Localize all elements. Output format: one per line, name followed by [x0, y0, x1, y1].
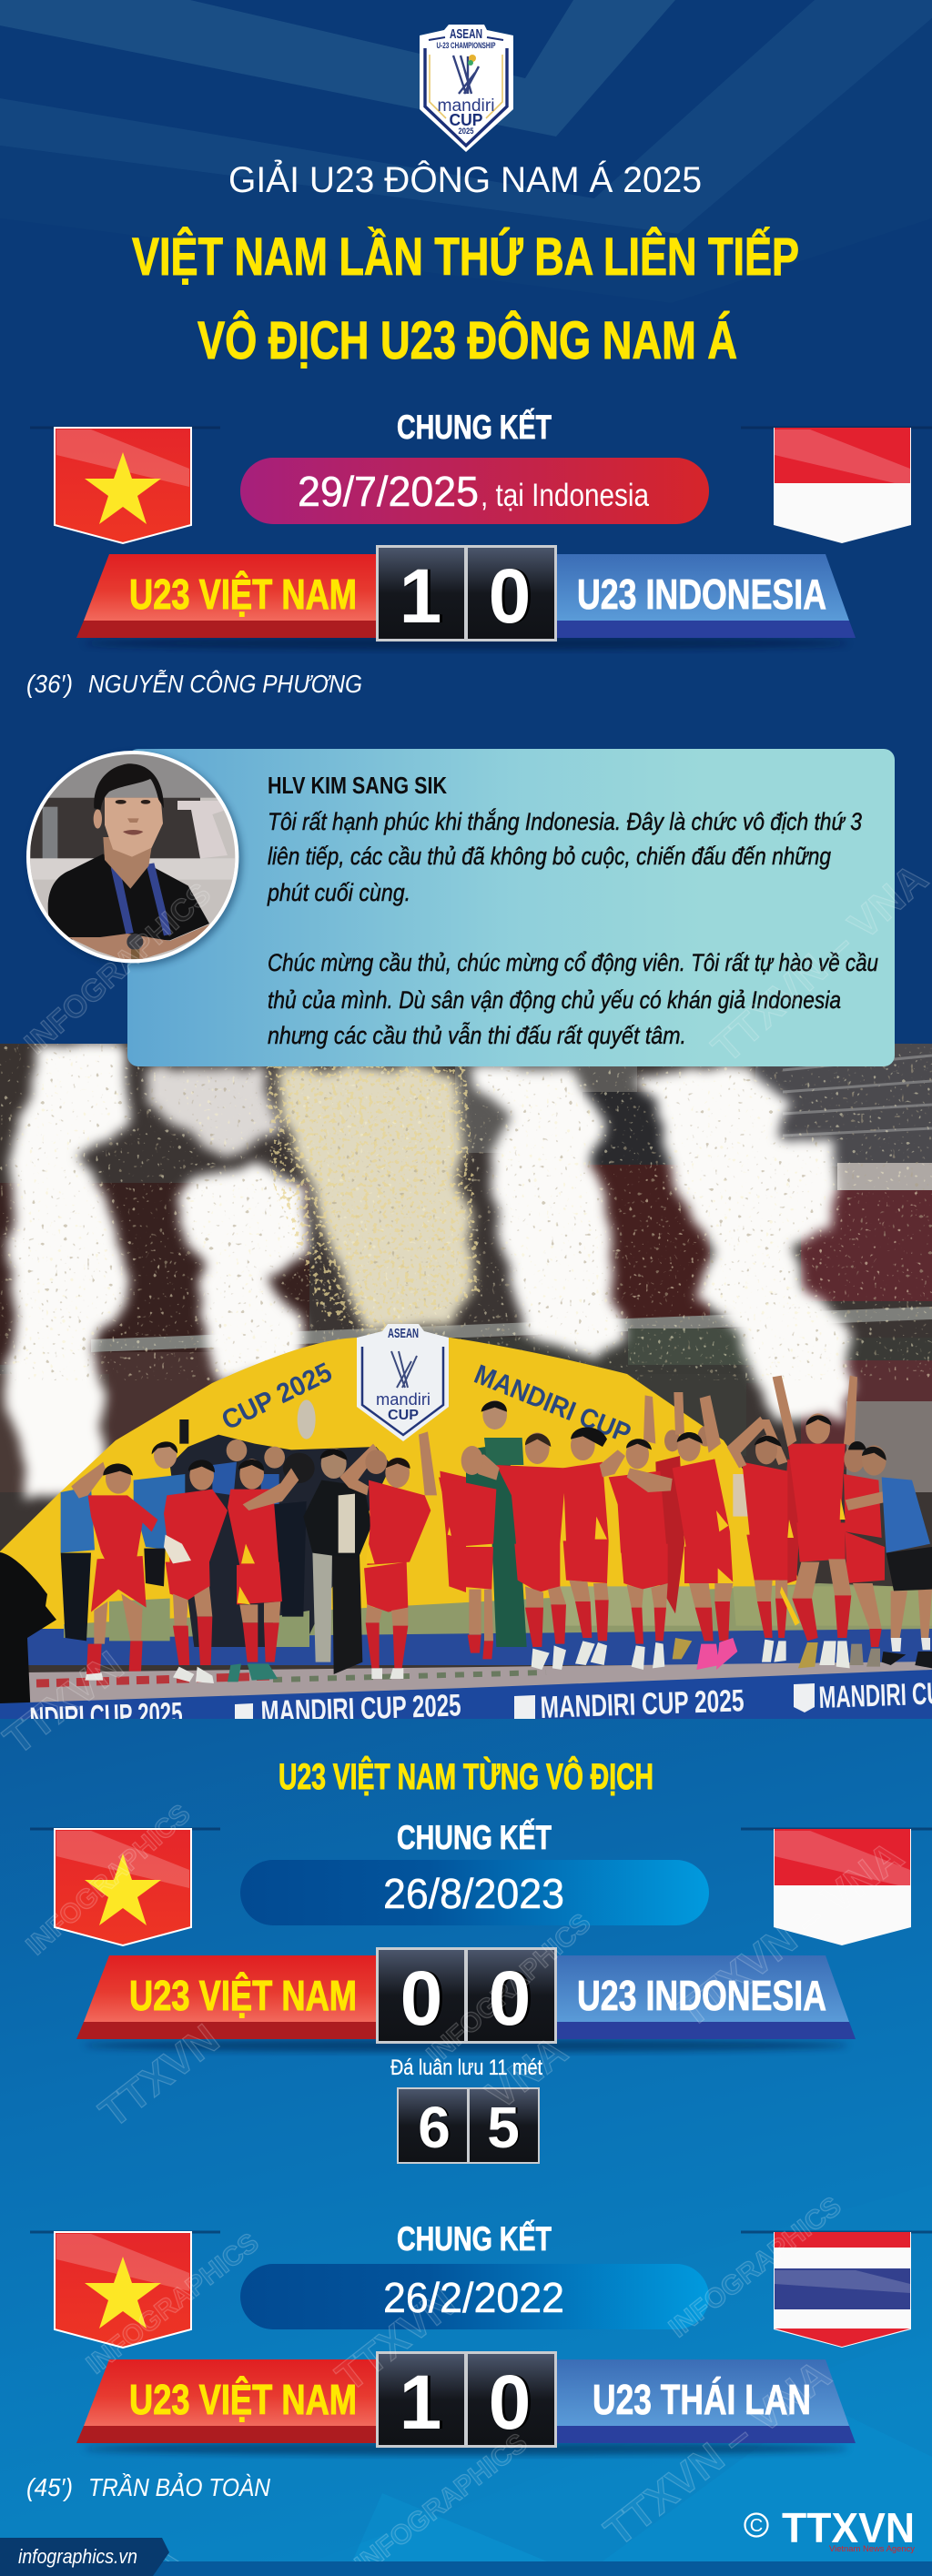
- team bar: U23 Viet Nam: [76, 2359, 382, 2443]
- photo logo on arch: ASEAN: [388, 1326, 419, 1341]
- goal scorer: (36′): [26, 670, 73, 698]
- flag: Viet Nam: [30, 2232, 220, 2348]
- section heading: U23 VIỆT NAM TỪNG VÔ ĐỊCH: [279, 1755, 653, 1797]
- watermarks: INFOGRAPHICS: [664, 2191, 847, 2344]
- title: VÔ ĐỊCH U23 ĐÔNG NAM Á: [198, 311, 737, 370]
- score: 1-0: 1: [402, 2359, 444, 2445]
- photo logo on arch: CUP: [388, 1408, 419, 1423]
- score: 1-0: 1: [400, 2359, 441, 2445]
- team bar: U23 Viet Nam: U23 VIỆT NAM: [129, 2376, 357, 2423]
- squad: legs and arms skin: [71, 1431, 437, 1644]
- team bar: U23 Viet Nam: [76, 1955, 382, 2039]
- quote text: HLV KIM SANG SIK: [268, 772, 447, 799]
- watermarks: TTXVN: [327, 2278, 464, 2400]
- team bar: U23 Thai Lan: [552, 2359, 856, 2443]
- watermarks: TTXVN – VNA: [703, 854, 932, 1071]
- score: 1-0: 0: [491, 553, 533, 639]
- photo logo on arch: mandiri: [376, 1390, 431, 1409]
- goal scorer: [26, 2472, 271, 2501]
- logo: TTXVN copyright: C: [750, 2516, 763, 2536]
- players and staff: right half: [439, 1376, 932, 1670]
- penalty score: 6-5: 5: [487, 2095, 520, 2160]
- scoreboard: [76, 545, 856, 650]
- team bar: U23 Indonesia: [552, 1955, 856, 2039]
- photographer silhouette: [0, 1552, 56, 1719]
- watermarks: [0, 854, 932, 2576]
- date pill: [240, 1860, 709, 1925]
- score: 1-0: 0: [489, 2359, 531, 2445]
- quote text: nhưng các cầu thủ vẫn thi đấu rất quyết tâm.: [268, 1022, 686, 1049]
- watermarks: INFOGRAPHICS: [21, 1799, 197, 1961]
- goal scorer: TRẦN BẢO TOÀN: [88, 2472, 271, 2501]
- flag: Thailand: [741, 2232, 932, 2348]
- date pill: 26/2/2022: [383, 2274, 564, 2321]
- watermarks: VNA: [477, 2026, 576, 2118]
- score: 0-0: 0: [403, 1955, 445, 2041]
- logo: TTXVN copyright: TTXVN: [782, 2504, 915, 2551]
- quote text: thủ của mình. Dù sân vận động chủ yếu có khán giả Indonesia: [268, 986, 841, 1014]
- score: 1-0: 1: [402, 553, 444, 639]
- sponsor banner: [0, 1670, 932, 1719]
- match card: final 2022: [26, 2220, 932, 2501]
- team bar: U23 Viet Nam: U23 VIỆT NAM: [129, 571, 357, 618]
- coach portrait: [26, 751, 242, 966]
- footer strip: [0, 2538, 932, 2576]
- flag: Indonesia: [741, 428, 932, 543]
- smoke plumes: [6, 1044, 850, 1497]
- squad: heads, hair, boots and accents: [461, 1413, 880, 1670]
- watermarks: TTXVN: [90, 2015, 228, 2137]
- dignitary in dark suit: [283, 1449, 371, 1674]
- watermarks: INFOGRAPHICS: [18, 876, 218, 1061]
- stage floor: [18, 1583, 932, 1706]
- logo: Mandiri Cup 2025 shield: 2025: [459, 126, 473, 136]
- date pill: 26/8/2023: [383, 1870, 564, 1917]
- watermarks: TTXVN – VNA: [595, 2350, 839, 2555]
- scoreboard: [76, 2351, 856, 2455]
- squad: legs and arms skin: [469, 1376, 932, 1641]
- score: 1-0: 0: [491, 2359, 533, 2445]
- squad: heads, hair, boots and accents: [85, 1450, 458, 1683]
- scoreboard: [76, 1947, 856, 2052]
- score: 0-0: [376, 1947, 557, 2044]
- score: 0-0: 0: [400, 1955, 442, 2041]
- background: keeper and crowd: [466, 1400, 932, 1647]
- quote text: liên tiếp, các cầu thủ đã không bỏ cuộc, chiến đấu đến những: [268, 843, 831, 870]
- penalty score: 6-5: 6: [418, 2095, 451, 2160]
- penalty score: 6-5: 6: [420, 2095, 452, 2160]
- players and staff: left half: [61, 1399, 466, 1683]
- yellow stage arch: [0, 1338, 819, 1647]
- flag: Viet Nam: [30, 428, 220, 543]
- sponsor banner: MANDIRI CUP 2025: [540, 1683, 745, 1725]
- top background: [0, 0, 932, 1044]
- heading: chung ket: CHUNG KẾT: [397, 2220, 552, 2258]
- flag: Viet Nam: [30, 1829, 220, 1945]
- heading: chung ket: CHUNG KẾT: [397, 1819, 552, 1856]
- score: 1-0: 1: [400, 553, 441, 639]
- squad: socks: [86, 1617, 408, 1674]
- goal scorer: NGUYỄN CÔNG PHƯƠNG: [88, 670, 362, 698]
- squad: socks: [468, 1595, 882, 1659]
- logo: TTXVN copyright: Vietnam News Agency: [829, 2544, 916, 2553]
- match card: final 2025: [26, 409, 932, 698]
- team bar: U23 Thai Lan: U23 THÁI LAN: [593, 2376, 811, 2423]
- subtitle: GIẢI U23 ĐÔNG NAM Á 2025: [228, 158, 702, 200]
- match card: final 2023: [30, 1819, 932, 2164]
- team bar: U23 Indonesia: U23 INDONESIA: [577, 571, 826, 618]
- stadium stands: [0, 1044, 932, 1492]
- date pill: 29/7/2025: [298, 468, 479, 515]
- watermarks: INFOGRAPHICS: [81, 2227, 265, 2380]
- background staff and crowd: [61, 1399, 391, 1647]
- team bar: U23 Indonesia: [552, 554, 856, 638]
- confetti: [0, 1044, 932, 1380]
- watermarks: TTXVN – VNA: [668, 1832, 912, 2036]
- date pill: [240, 2264, 709, 2329]
- logo: Mandiri Cup 2025 shield: [420, 25, 513, 152]
- yellow stage arch: CUP 2025: [218, 1358, 337, 1436]
- watermarks: INFOGRAPHICS: [421, 1908, 597, 2070]
- red squad: shirts and shorts: [88, 1471, 466, 1612]
- source: infographics.vn: infographics.vn: [18, 2545, 137, 2568]
- staff in blue shirt: [862, 1445, 932, 1668]
- sponsor banner: MANDIRI CUP 2025: [260, 1688, 461, 1730]
- title: [132, 227, 799, 370]
- heading: chung ket: CHUNG KẾT: [397, 409, 552, 446]
- watermarks: INFOGRAPHICS: [350, 2428, 533, 2576]
- score: 1-0: [376, 2351, 557, 2448]
- flag: Indonesia: [741, 1829, 932, 1945]
- sponsor banner: NDIRI CUP 2025: [29, 1696, 183, 1736]
- red squad: shirts and shorts: [439, 1444, 885, 1592]
- date pill: [240, 458, 709, 524]
- quote panel: coach Kim Sang Sik: [26, 749, 895, 1066]
- penalty label: Đá luân lưu 11 mét: [390, 2056, 542, 2080]
- lower background: [0, 1719, 932, 2576]
- logo: Mandiri Cup 2025 shield: mandiri: [437, 96, 495, 116]
- score: 0-0: 0: [491, 1955, 533, 2041]
- date pill: , tại Indonesia: [481, 478, 649, 513]
- score: 1-0: 0: [489, 553, 531, 639]
- photo: team celebrating with trophy: [0, 1044, 932, 1736]
- yellow stage arch: MANDIRI CUP: [470, 1359, 634, 1450]
- photo logo on arch: [357, 1324, 449, 1441]
- quote text: [267, 772, 878, 1049]
- team bar: U23 Indonesia: U23 INDONESIA: [577, 1972, 826, 2019]
- penalty score: 6-5: [397, 2087, 540, 2164]
- team bar: U23 Viet Nam: [76, 554, 382, 638]
- logo: Mandiri Cup 2025 shield: CUP: [450, 111, 482, 129]
- quote text: phút cuối cùng.: [267, 879, 410, 906]
- score: 1-0: [376, 545, 557, 641]
- team bar: U23 Viet Nam: U23 VIỆT NAM: [129, 1972, 357, 2019]
- goal scorer: (45′): [26, 2473, 73, 2501]
- logo: Mandiri Cup 2025 shield: U-23 CHAMPIONSHIP: [437, 41, 495, 50]
- logo: Mandiri Cup 2025 shield: ASEAN: [450, 26, 482, 42]
- penalty score: 6-5: 5: [489, 2095, 522, 2160]
- score: 0-0: 0: [489, 1955, 531, 2041]
